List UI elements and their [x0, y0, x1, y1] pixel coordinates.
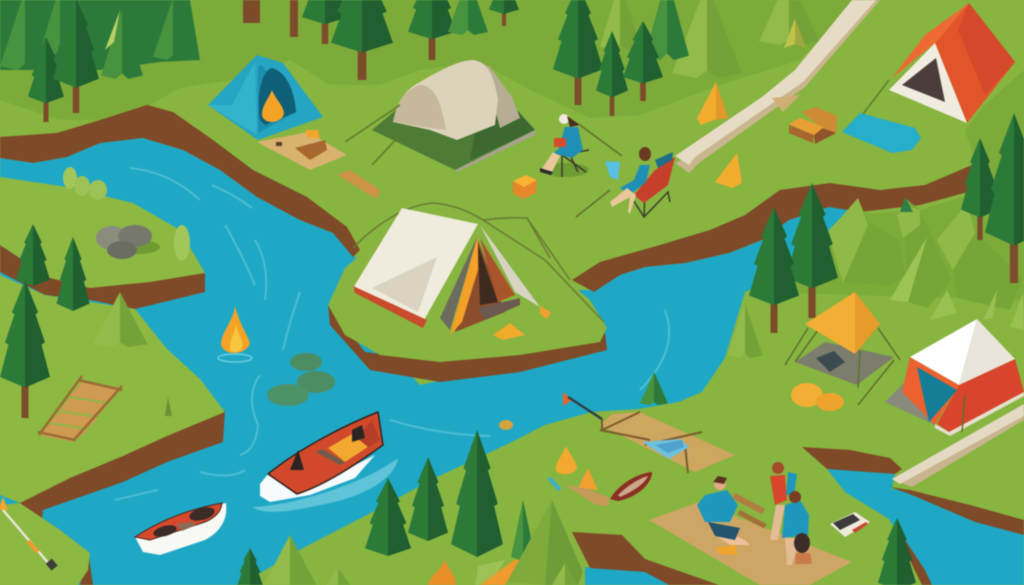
tuft of grass — [165, 397, 172, 416]
right trees — [749, 113, 1024, 333]
path lower right — [892, 404, 1024, 487]
book and red case — [830, 512, 870, 537]
small conifer by water — [640, 372, 668, 405]
peninsula island — [328, 305, 607, 382]
beige tent — [345, 60, 535, 172]
orange cooler — [513, 175, 537, 199]
lower creek — [827, 469, 1024, 585]
wooden footbridge — [38, 376, 122, 442]
orange canopy shelter — [785, 292, 900, 405]
bottom right tree — [878, 518, 916, 585]
right mountains — [728, 197, 1024, 358]
river — [0, 138, 850, 585]
upper bank left — [0, 105, 360, 257]
upper bank right — [572, 165, 972, 292]
camper on red chair — [576, 147, 675, 217]
red boat — [253, 412, 398, 512]
creek banks — [802, 447, 1024, 585]
orange stones on island — [493, 323, 525, 340]
river ripples — [115, 168, 669, 500]
path top right — [675, 0, 880, 173]
bottom left land — [80, 550, 93, 585]
red tent — [860, 3, 1015, 123]
big sand mat — [649, 502, 852, 585]
hammock area — [563, 392, 735, 473]
river stones — [267, 353, 335, 406]
three campers around plank — [697, 462, 812, 565]
bottom trees left — [237, 430, 503, 585]
bottom fire — [428, 556, 522, 585]
flame in river — [218, 306, 252, 362]
red and white tent — [885, 319, 1024, 436]
forest top centre — [243, 0, 519, 80]
flames and canoe — [549, 446, 652, 506]
forest top left — [0, 0, 200, 122]
white rowboat — [135, 503, 226, 555]
bottom bank — [572, 532, 719, 585]
bottom trees centre — [507, 500, 583, 585]
buoy — [499, 420, 513, 430]
pond — [842, 113, 921, 153]
left trees — [0, 224, 148, 418]
yellow boulders — [791, 383, 844, 411]
left upper land — [0, 245, 205, 309]
forest top right — [553, 0, 819, 116]
sand mat and campfire kit — [257, 130, 347, 170]
camper reading in chair — [540, 114, 622, 177]
wooden chest — [789, 107, 837, 144]
shaded right hills — [730, 70, 1024, 400]
large white tent on island — [353, 203, 604, 335]
oar bottom left — [0, 497, 58, 571]
wooden plank — [337, 170, 380, 199]
small bushes — [63, 167, 190, 261]
shaded hills behind forest — [0, 0, 860, 120]
left lower land — [15, 410, 225, 520]
grey rocks — [96, 225, 160, 259]
small bottom water — [585, 567, 669, 585]
teal tent — [208, 55, 323, 140]
yellow cones — [697, 82, 742, 188]
right lower land — [270, 292, 1024, 585]
